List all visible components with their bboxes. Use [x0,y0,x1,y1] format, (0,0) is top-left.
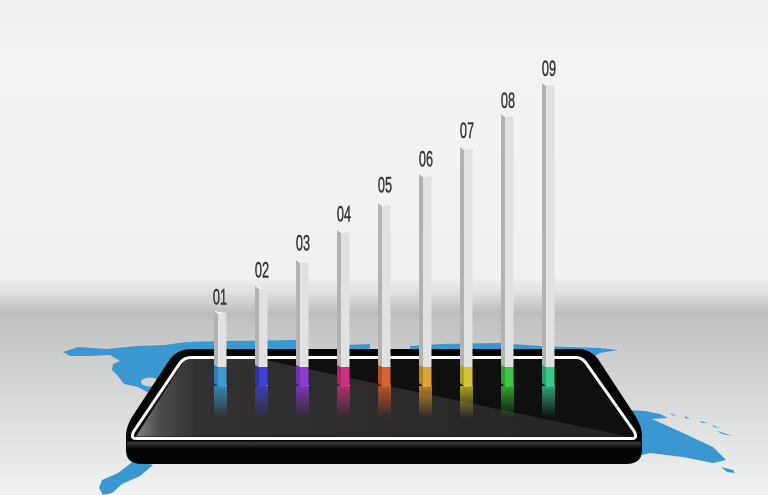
label 04: 04 [337,202,351,226]
label 08: 08 [501,88,515,113]
bar 02 [255,258,269,387]
map: islands [670,413,735,473]
map: gulf inlet [141,378,159,386]
map: south america [99,460,153,495]
bar 03 [296,231,310,387]
label 07: 07 [460,118,474,143]
tablet: bevel band [127,441,641,448]
map: eastern landmass [628,410,726,463]
label 06: 06 [419,147,433,171]
map: northern landmass strip [346,343,618,357]
label 03: 03 [296,231,310,255]
bar 08 [501,88,515,387]
tablet: body [126,349,642,464]
label 09: 09 [542,56,556,81]
bar 05 [378,173,392,387]
bar 07 [460,118,474,387]
bar 06 [419,147,433,387]
bar reflections on screen [214,386,555,418]
map: north america [63,340,296,392]
bar 09 [542,56,556,387]
tablet: screen glare [136,359,628,436]
label 01: 01 [213,285,227,309]
label 02: 02 [255,258,269,282]
world map [63,340,735,495]
label 05: 05 [378,173,392,197]
bar 04 [337,202,351,387]
chart: bars [213,56,556,387]
bar 01 [213,285,227,387]
tablet: white screen border [132,358,636,438]
tablet [126,349,642,464]
